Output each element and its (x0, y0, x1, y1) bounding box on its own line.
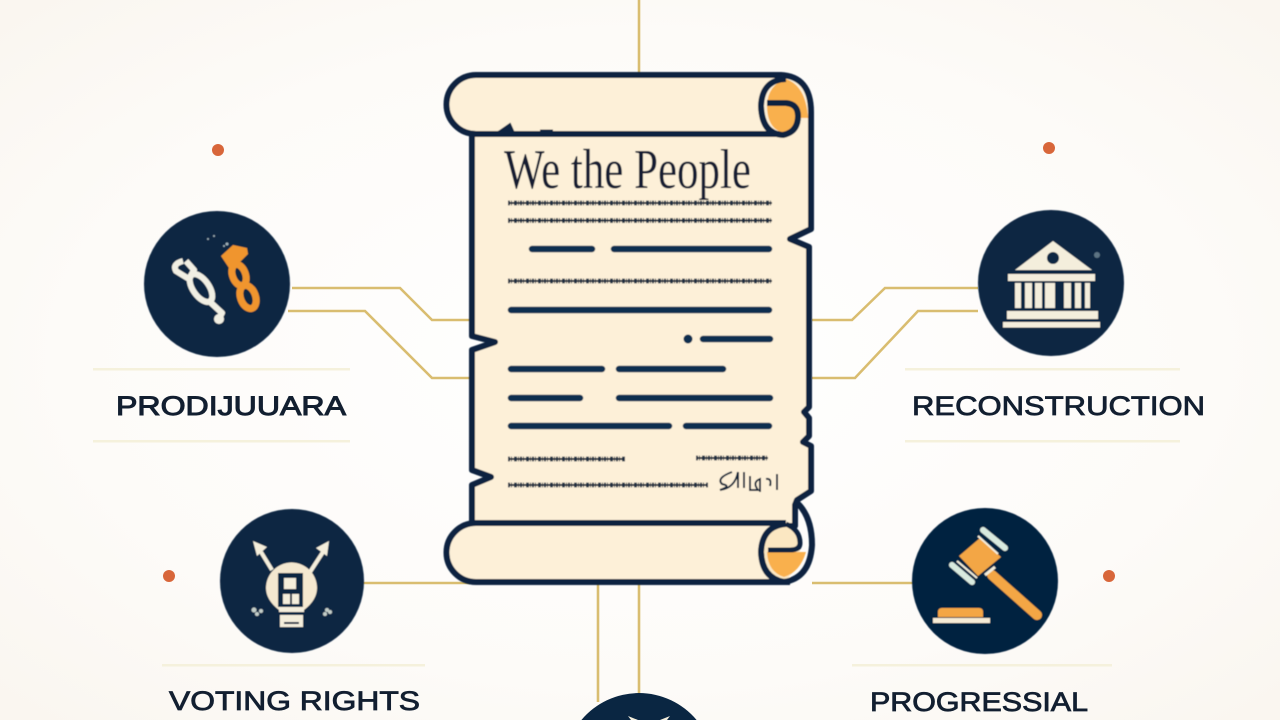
signature (720, 472, 777, 492)
bottom roll (446, 501, 812, 582)
label: Prodijuuara: PRODIJUUARA (116, 391, 346, 421)
heading: We the People: We the People (504, 139, 751, 201)
label: Voting Rights: VOTING RIGHTS (169, 686, 420, 716)
icon: broken chain (144, 211, 290, 357)
scroll document (446, 75, 812, 582)
connector lines (288, 0, 978, 702)
scroll body (472, 75, 811, 526)
accent dots (163, 142, 1115, 582)
label: Reconstruction: RECONSTRUCTION (912, 391, 1205, 421)
icon: bottom circle (cropped) (581, 693, 697, 720)
scribbled text lines (508, 203, 772, 485)
icon: gavel (912, 508, 1058, 654)
icon: government building (978, 210, 1124, 356)
top roll (447, 75, 808, 135)
solid text lines (511, 249, 770, 426)
label: Progressial: PROGRESSIAL (870, 687, 1088, 717)
icon: light bulb with arrows (220, 509, 364, 653)
